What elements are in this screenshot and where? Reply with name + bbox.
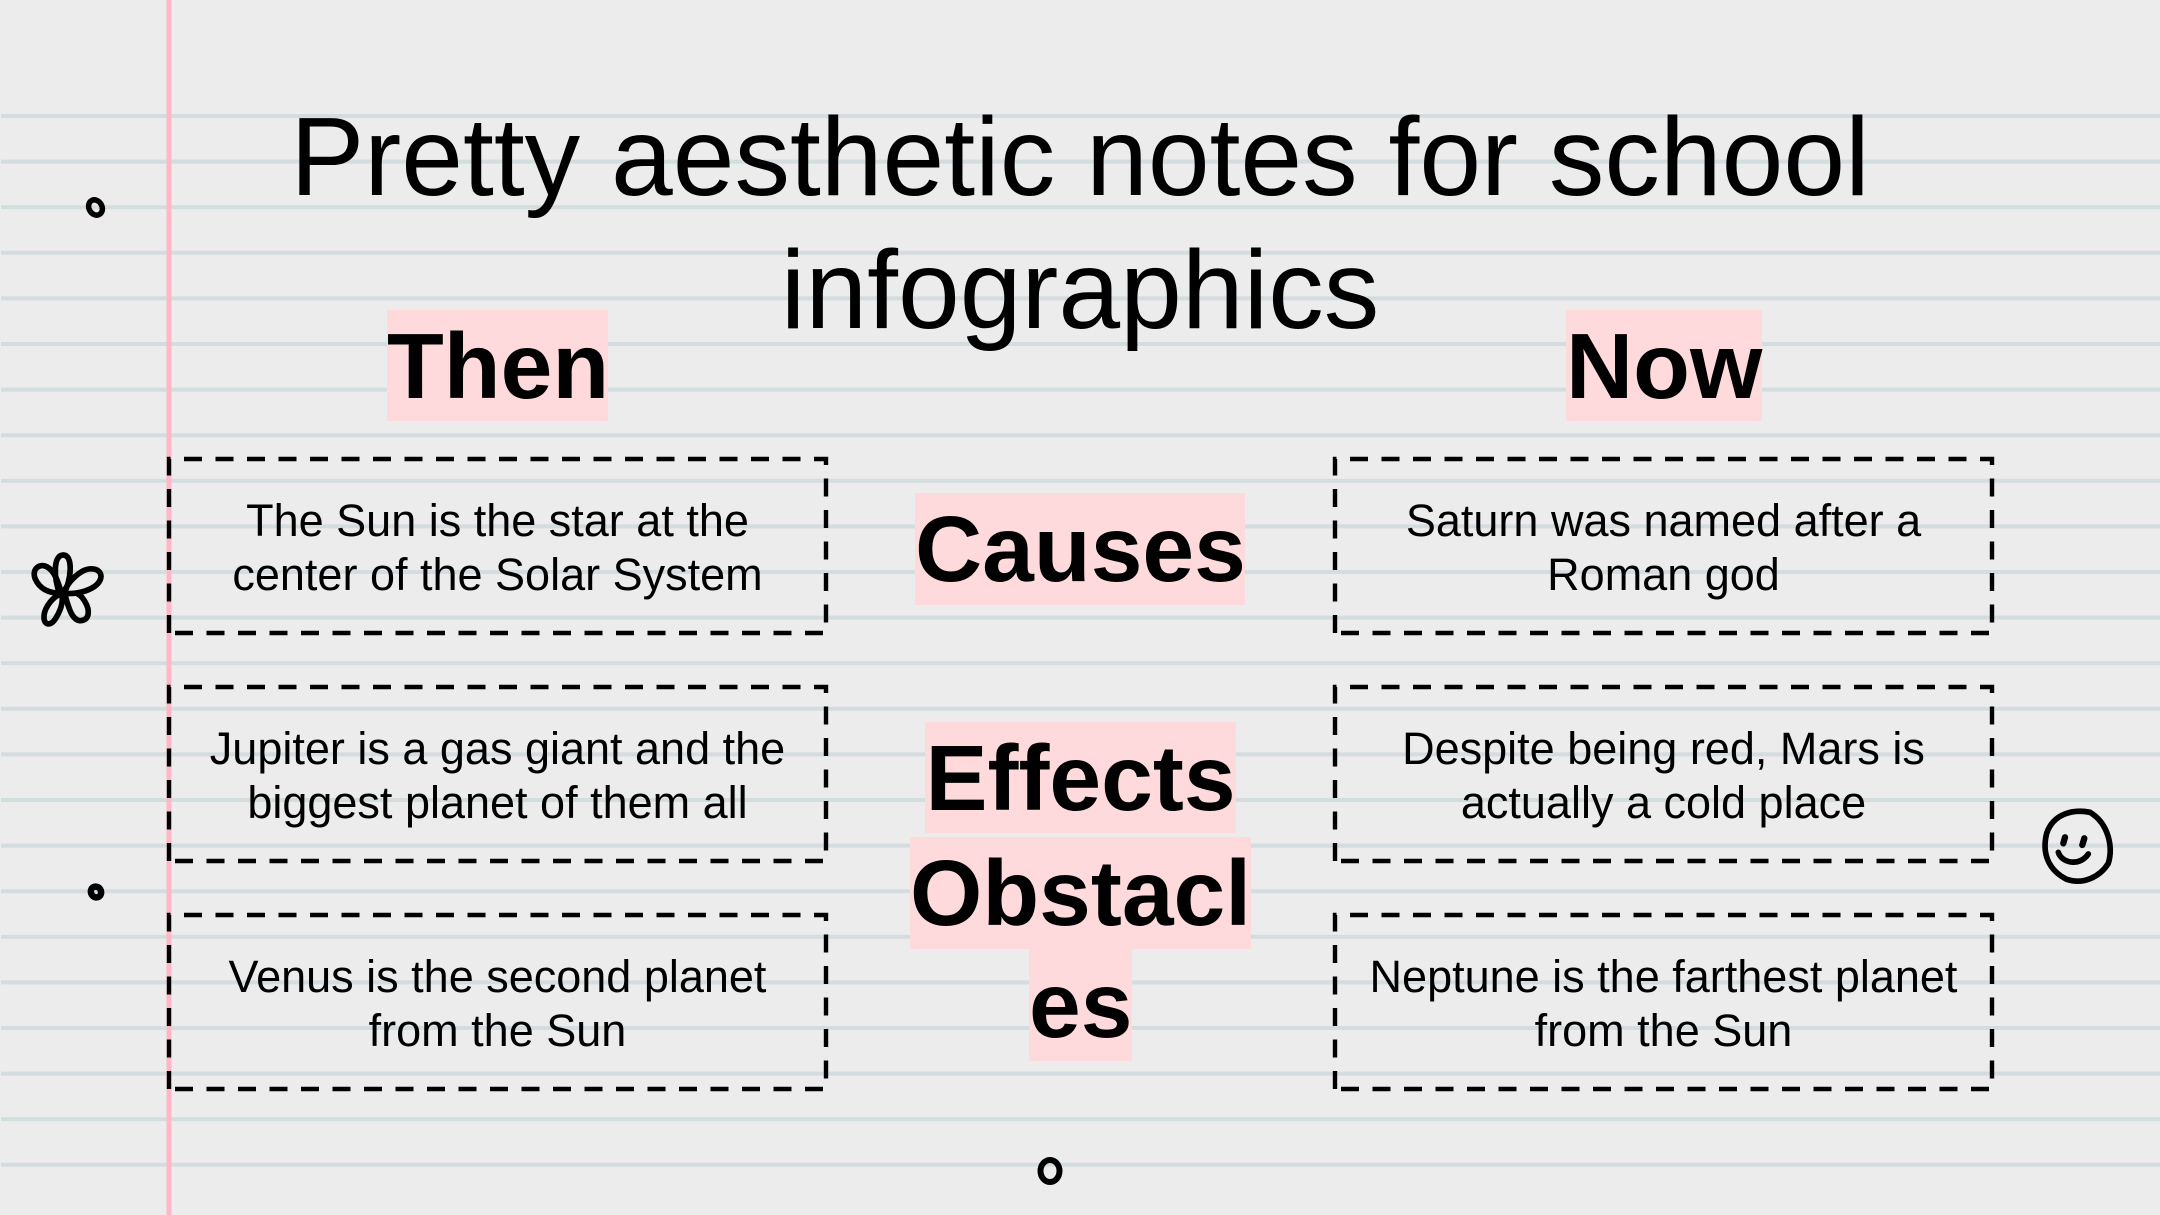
panel: then box 1 — [166, 456, 828, 636]
panel: then box 2: Jupiter is a gas giant and the — [210, 723, 785, 774]
panel: now box 1 — [1332, 456, 1994, 636]
panel: now box 3: from the Sun — [1535, 1005, 1792, 1056]
label: Causes: Causes — [915, 497, 1246, 601]
icon: small circle top left — [86, 197, 105, 218]
label: Obstacles — [910, 837, 1251, 1061]
icon: smiley face — [2045, 811, 2110, 881]
panel: then box 3 — [166, 912, 828, 1092]
panel: then box 2 — [166, 684, 828, 864]
label: Obstacles: es — [1029, 953, 1132, 1057]
panel: then box 3: from the Sun — [369, 1005, 626, 1056]
title: Pretty aesthetic notes for school — [290, 95, 1870, 219]
panel: then box 1: The Sun is the star at the — [246, 495, 749, 546]
panel: now box 1: Saturn was named after a — [1406, 495, 1921, 546]
panel: now box 2: actually a cold place — [1461, 777, 1866, 828]
label: Obstacles: Obstacl — [910, 841, 1251, 945]
panel: now box 2: Despite being red, Mars is — [1402, 723, 1925, 774]
panel: then box 3: Venus is the second planet — [229, 951, 766, 1002]
title — [290, 95, 1870, 352]
heading: Now: Now — [1566, 314, 1762, 418]
panel: then box 2: biggest planet of them all — [247, 777, 748, 828]
icon: small circle bottom — [1040, 1160, 1060, 1182]
panel: now box 2 — [1332, 684, 1994, 864]
panel: now box 3 — [1332, 912, 1994, 1092]
panel: now box 3: Neptune is the farthest planet — [1370, 951, 1957, 1002]
title: infographics — [781, 228, 1379, 352]
icon: small circle lower left — [89, 885, 103, 899]
panel: now box 1: Roman god — [1547, 549, 1780, 600]
label: Effects: Effects — [925, 726, 1236, 830]
icon: flower — [34, 555, 101, 624]
heading: Then: Then — [387, 314, 609, 418]
panel: then box 1: center of the Solar System — [232, 549, 763, 600]
